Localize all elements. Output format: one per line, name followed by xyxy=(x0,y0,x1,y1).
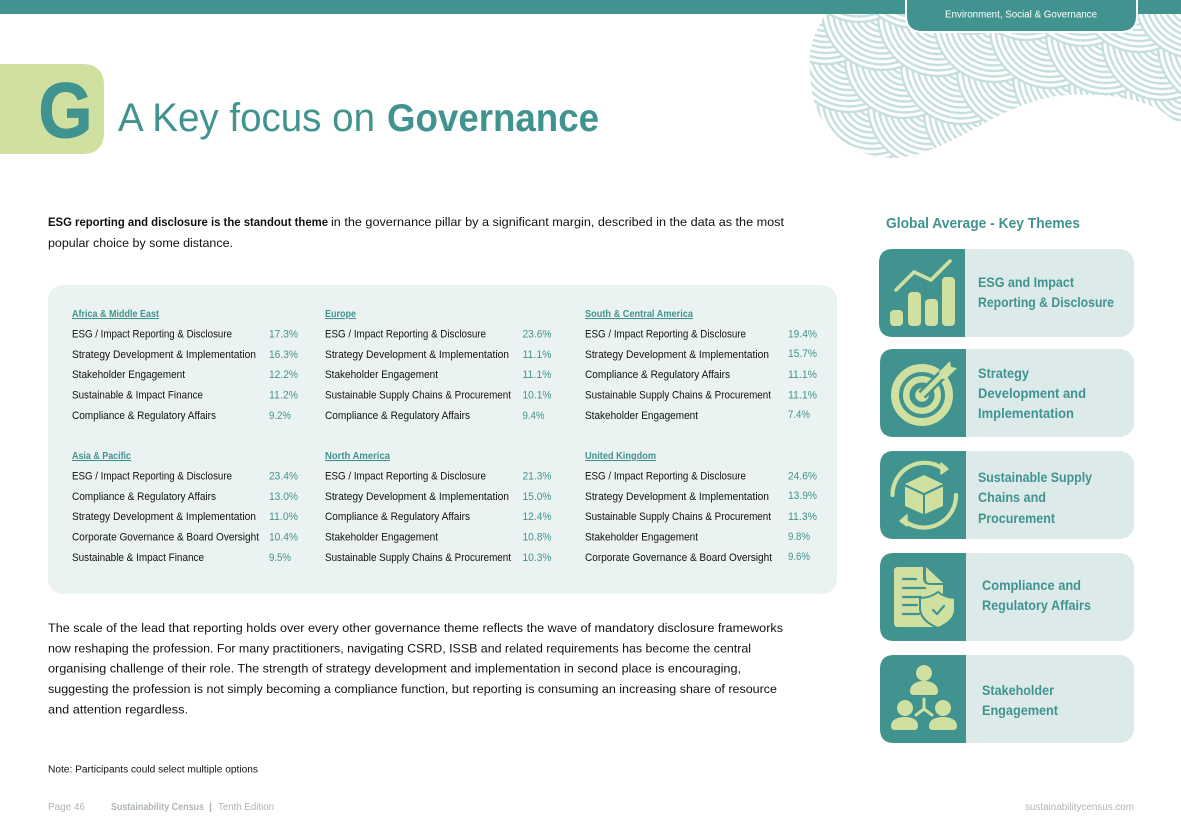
region: South & Central America: Compliance & Regulatory Affairs xyxy=(585,369,731,381)
region: North America: Compliance & Regulatory Affairs xyxy=(325,511,471,523)
region: Europe: Compliance & Regulatory Affairs xyxy=(325,410,471,422)
card label xyxy=(978,274,1114,310)
letter badge: G xyxy=(38,66,92,154)
region: Africa & Middle East: 12.2% xyxy=(269,369,298,381)
region: South & Central America: 11.1% xyxy=(788,390,817,402)
region: Africa & Middle East: 17.3% xyxy=(269,328,298,340)
region: Asia & Pacific: 11.0% xyxy=(269,511,298,523)
card label: Strategy xyxy=(978,365,1029,381)
region: Africa & Middle East: ESG / Impact Reporting & Disclosure xyxy=(72,328,232,340)
region: North America: 15.0% xyxy=(522,491,552,503)
region: Asia & Pacific: Sustainable & Impact Finance xyxy=(72,552,204,564)
icon: document with shield xyxy=(894,567,955,628)
card label xyxy=(982,682,1058,718)
card label: Compliance and xyxy=(982,577,1081,593)
region: United Kingdom: Corporate Governance & Board Oversight xyxy=(585,552,772,564)
card label: Reporting & Disclosure xyxy=(978,294,1114,310)
intro text xyxy=(48,215,785,250)
note: Note: Participants could select multiple options xyxy=(48,764,258,776)
body text: and attention regardless. xyxy=(48,702,188,716)
card label xyxy=(978,469,1092,526)
region: Asia & Pacific: Compliance & Regulatory Affairs xyxy=(72,491,217,503)
region: United Kingdom: Stakeholder Engagement xyxy=(585,532,698,544)
region: Asia & Pacific: Strategy Development & Implementation xyxy=(72,511,256,523)
card: Stakeholder Engagement xyxy=(880,655,1134,743)
region: Asia & Pacific: Asia & Pacific xyxy=(72,450,131,462)
card: ESG and Impact Reporting xyxy=(879,249,1134,337)
region: Europe: Europe xyxy=(325,308,356,320)
card label: Procurement xyxy=(978,510,1055,526)
footer left: Page 46 xyxy=(48,801,85,813)
region: Europe: 11.1% xyxy=(522,349,552,361)
decorative scale pattern xyxy=(810,14,1181,158)
icon: target with arrow xyxy=(895,361,957,422)
card label: Sustainable Supply xyxy=(978,469,1092,485)
region: South & Central America: 19.4% xyxy=(788,328,817,340)
region: Africa & Middle East: 11.2% xyxy=(269,390,298,402)
region: Europe: 23.6% xyxy=(522,328,552,340)
region: Africa & Middle East xyxy=(72,308,298,422)
region: North America: Strategy Development & Implementation xyxy=(325,491,509,503)
region: North America: 10.3% xyxy=(522,552,552,564)
card label: Chains and xyxy=(978,489,1046,505)
region: North America: ESG / Impact Reporting & Disclosure xyxy=(325,470,486,482)
region: North America: 12.4% xyxy=(522,511,552,523)
region: Africa & Middle East: Africa & Middle East xyxy=(72,308,159,320)
card: Sustainable Supply Chains xyxy=(880,451,1134,539)
region: South & Central America: Sustainable Supply Chains & Procurement xyxy=(585,390,771,402)
intro text: popular choice by some distance. xyxy=(48,236,233,250)
footer left: | xyxy=(209,801,212,813)
icon: bar chart with trend line xyxy=(890,261,955,326)
region: Europe: 11.1% xyxy=(522,369,552,381)
body text: now reshaping the profession. For many practitioners, navigating CSRD, ISSB and related requirements has become the central xyxy=(48,642,751,656)
region: South & Central America: 11.1% xyxy=(788,369,817,381)
region: Asia & Pacific: 23.4% xyxy=(269,470,298,482)
title: A Key focus on xyxy=(118,96,375,140)
region: United Kingdom: 11.3% xyxy=(788,511,817,523)
region: United Kingdom: 13.9% xyxy=(788,490,817,502)
body text: The scale of the lead that reporting holds over every other governance theme reflects the wave of mandatory disclosure frameworks xyxy=(48,621,783,635)
region: Europe: Strategy Development & Implementation xyxy=(325,349,509,361)
card label: Development and xyxy=(978,385,1086,401)
card label xyxy=(982,577,1091,613)
region: United Kingdom: ESG / Impact Reporting & Disclosure xyxy=(585,470,746,482)
region: Asia & Pacific: 10.4% xyxy=(269,532,298,544)
intro text: in the governance pillar by a significant margin, described in the data as the most xyxy=(331,215,785,229)
section tab xyxy=(906,0,1137,32)
card: Compliance xyxy=(880,553,1134,641)
region: United Kingdom: 9.6% xyxy=(788,551,810,563)
region: Asia & Pacific xyxy=(72,450,298,564)
sidebar heading: Global Average - Key Themes xyxy=(886,215,1080,232)
footer url: sustainabilitycensus.com xyxy=(1025,801,1134,813)
region: United Kingdom: 9.8% xyxy=(788,531,810,543)
region: Europe: Sustainable Supply Chains & Procurement xyxy=(325,390,511,402)
region: Africa & Middle East: Strategy Development & Implementation xyxy=(72,349,256,361)
region: Asia & Pacific: Corporate Governance & Board Oversight xyxy=(72,532,259,544)
region: Africa & Middle East: Compliance & Regulatory Affairs xyxy=(72,410,217,422)
icon: connected people xyxy=(891,665,957,730)
region: North America: Stakeholder Engagement xyxy=(325,532,438,544)
region: Asia & Pacific: 13.0% xyxy=(269,491,298,503)
region: Europe xyxy=(325,308,552,422)
region: United Kingdom xyxy=(585,450,817,564)
region: Africa & Middle East: 9.2% xyxy=(269,410,291,422)
body text xyxy=(48,621,783,716)
footer left xyxy=(48,801,274,813)
region: South & Central America: 15.7% xyxy=(788,348,817,360)
region: South & Central America: Stakeholder Engagement xyxy=(585,410,698,422)
card label: Stakeholder xyxy=(982,682,1054,698)
region: Europe: Stakeholder Engagement xyxy=(325,369,438,381)
region: Africa & Middle East: Stakeholder Engagement xyxy=(72,369,185,381)
section tab: Environment, Social & Governance xyxy=(945,10,1097,20)
footer left: Sustainability Census xyxy=(111,801,204,813)
footer left: Tenth Edition xyxy=(218,801,274,813)
region: North America: 21.3% xyxy=(522,470,552,482)
title xyxy=(118,96,599,140)
region: South & Central America: 7.4% xyxy=(788,409,810,421)
region: Europe: 10.1% xyxy=(522,390,552,402)
intro text: ESG reporting and disclosure is the standout theme xyxy=(48,215,328,229)
letter badge xyxy=(0,64,104,154)
region: North America xyxy=(325,450,552,564)
region: United Kingdom: Sustainable Supply Chains & Procurement xyxy=(585,511,771,523)
region: South & Central America xyxy=(585,308,817,422)
card label: Regulatory Affairs xyxy=(982,597,1091,613)
region: United Kingdom: United Kingdom xyxy=(585,450,656,462)
top bar xyxy=(0,0,1181,14)
region: Europe: ESG / Impact Reporting & Disclosure xyxy=(325,328,486,340)
region: Europe: 9.4% xyxy=(522,410,545,422)
region: Africa & Middle East: 16.3% xyxy=(269,349,298,361)
region: Asia & Pacific: 9.5% xyxy=(269,552,291,564)
card label: Engagement xyxy=(982,702,1058,718)
region: Asia & Pacific: ESG / Impact Reporting & Disclosure xyxy=(72,470,232,482)
title: Governance xyxy=(387,97,599,140)
icon: box with circular arrows xyxy=(892,463,956,528)
body text: organising challenge of their role. The strength of strategy development and implementation in second place is encouraging, xyxy=(48,662,741,676)
card label xyxy=(978,365,1086,421)
region: South & Central America: ESG / Impact Reporting & Disclosure xyxy=(585,328,746,340)
region: North America: North America xyxy=(325,450,390,462)
region: Africa & Middle East: Sustainable & Impact Finance xyxy=(72,390,203,402)
card label: Implementation xyxy=(978,405,1074,421)
panel: regional themes xyxy=(48,285,837,594)
card label: ESG and Impact xyxy=(978,274,1074,290)
body text: suggesting the profession is not simply becoming a compliance function, but reporting is consuming an increasing share of resource xyxy=(48,682,777,696)
region: North America: 10.8% xyxy=(522,532,552,544)
region: South & Central America: South & Central America xyxy=(585,308,693,320)
region: North America: Sustainable Supply Chains & Procurement xyxy=(325,552,511,564)
region: United Kingdom: 24.6% xyxy=(788,470,817,482)
region: United Kingdom: Strategy Development & Implementation xyxy=(585,491,769,503)
card: Strategy Development xyxy=(880,349,1134,437)
region: South & Central America: Strategy Development & Implementation xyxy=(585,349,769,361)
